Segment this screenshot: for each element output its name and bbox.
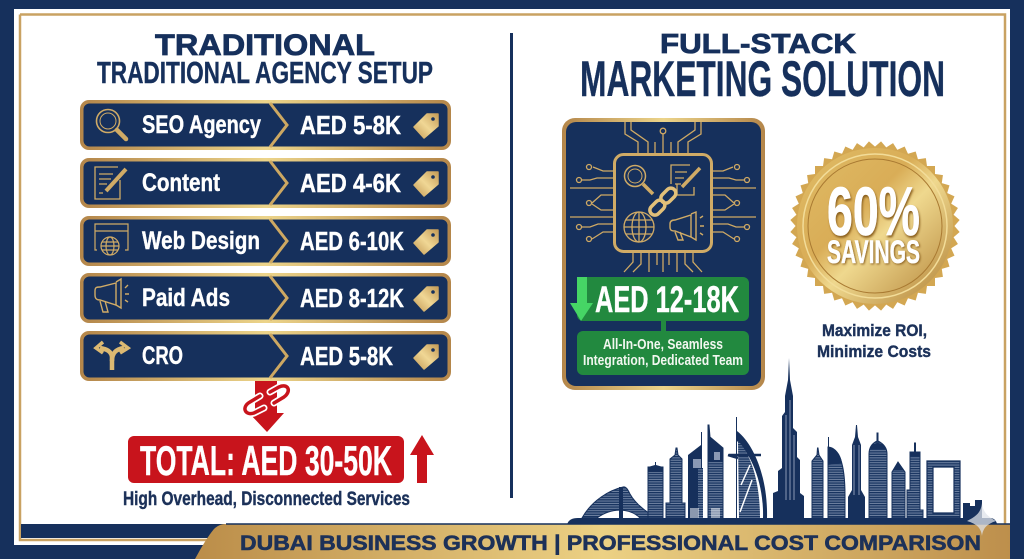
Dubai Frame [927,461,960,518]
Burj Al Arab [728,417,767,518]
row: Content [80,158,451,208]
footer ribbon [195,524,1010,559]
row: Paid Ads: Paid Ads [142,284,230,312]
row: Web Design: Web Design [142,227,260,255]
heading: traditional [97,29,433,90]
text: ROI note: Maximize ROI, [822,321,927,340]
heading: full-stack [580,28,945,107]
benefits bar: Integration, Dedicated Team [583,353,743,369]
row: CRO [80,331,451,381]
heading: traditional: TRADITIONAL AGENCY SETUP [97,55,433,90]
total cost box [128,436,404,484]
skyline base [567,518,997,525]
row: Paid Ads: AED 8-12K [300,283,404,313]
icon: megaphone [670,212,704,240]
text: ROI note [817,321,931,361]
row: Web Design: AED 6-10K [300,226,404,256]
price bar: AED 12-18K [595,279,739,320]
badge: 60% savings: SAVINGS [827,234,920,270]
divider [510,33,513,498]
connector [661,321,666,331]
benefits bar: All-In-One, Seamless [603,337,723,353]
heading: traditional: TRADITIONAL [155,29,375,62]
chip [614,154,712,252]
icon: megaphone [95,279,129,312]
total cost box: TOTAL: AED 30-50K [140,437,392,484]
text: overhead note: High Overhead, Disconnected Services [123,489,410,510]
footer ribbon: DUBAI BUSINESS GROWTH | PROFESSIONAL COST COMPARISON [240,532,981,555]
icon: browser and globe [95,224,128,255]
row: Content: Content [142,169,221,197]
icon: magnifier [96,110,126,139]
bridge arch [582,487,657,518]
row: SEO Agency [80,100,451,150]
navy footer band left [21,524,231,538]
icon: sparkle [967,503,996,536]
benefits bar [577,331,749,375]
row: Paid Ads [80,273,451,323]
icon: forked arrows [96,342,128,370]
Burj Khalifa [773,358,804,518]
heading: full-stack: FULL-STACK [660,28,856,59]
badge: 60% savings: 60% [827,173,920,250]
arrow: red down with broken chain [245,381,288,432]
panel: full-stack solution card [562,118,765,390]
icon: document and pen [671,165,700,195]
Dubai skyline [567,358,997,525]
row: Content: AED 4-6K [300,168,401,198]
row: Web Design [80,216,451,266]
row: CRO: AED 5-8K [300,341,393,371]
towers [648,467,663,518]
icon: magnifier [624,166,653,194]
price bar [570,277,749,321]
mid towers [812,448,823,518]
right navy frame strip [1010,0,1024,559]
row: CRO: CRO [142,342,183,370]
icon: globe [624,212,654,242]
circuit traces [570,122,756,272]
icon: chain link [648,186,678,217]
arrow: green down [570,277,593,321]
badge: 60% savings [790,141,960,311]
panel: traditional agency cost rows [80,100,451,381]
row: SEO Agency: AED 5-8K [300,110,401,140]
row: SEO Agency: SEO Agency [142,111,261,139]
serrated seal edge [790,141,960,311]
low buildings [963,500,982,518]
icon: document and pen [95,167,126,199]
arrow: red up [410,435,434,483]
text: ROI note: Minimize Costs [817,342,931,361]
